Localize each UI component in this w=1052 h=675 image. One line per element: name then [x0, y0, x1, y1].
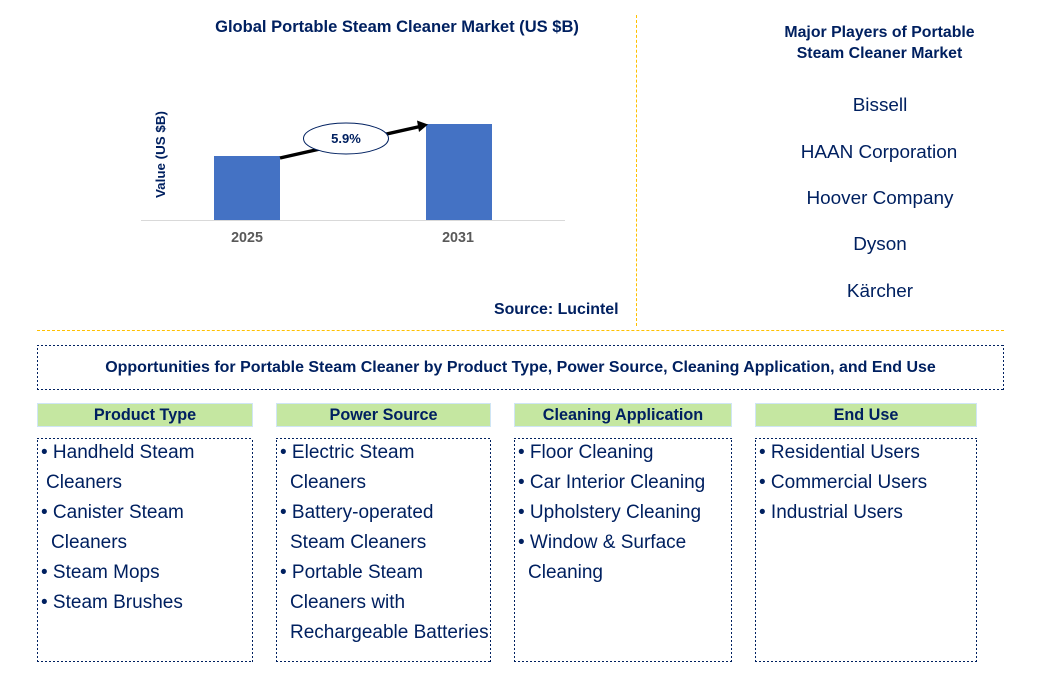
panel: product type: Cleaners [46, 472, 122, 493]
players heading: Steam Cleaner Market [797, 45, 962, 62]
panel: power source: Rechargeable Batteries [290, 622, 489, 643]
panel: product type: • Handheld Steam [41, 442, 194, 463]
column header: Power Source [276, 403, 491, 427]
panel: power source [276, 438, 491, 662]
player: Bissell: Bissell [853, 95, 907, 116]
horizontal divider [37, 330, 1004, 331]
panel: end use: • Residential Users [759, 442, 920, 463]
opportunities banner: Opportunities for Portable Steam Cleaner by Product Type, Power Source, Cleaning Application, and End Use [105, 359, 936, 376]
column header: Product Type: Product Type [94, 406, 196, 424]
panel: cleaning application: • Floor Cleaning [518, 442, 654, 463]
player: Dyson: Dyson [853, 234, 907, 255]
panel: product type: Cleaners [51, 532, 127, 553]
panel: end use: • Commercial Users [759, 472, 927, 493]
vertical divider [636, 15, 637, 326]
players heading: Major Players of Portable [784, 24, 975, 41]
panel: cleaning application: • Window & Surface [518, 532, 686, 553]
column header: End Use [755, 403, 977, 427]
panel: power source: • Portable Steam [280, 562, 423, 583]
column header: End Use: End Use [834, 406, 898, 424]
growth arrow [280, 120, 428, 158]
growth rate ellipse [304, 123, 388, 154]
panel: product type: • Steam Mops [41, 562, 160, 583]
player list [801, 95, 957, 302]
player: HAAN Corporation: HAAN Corporation [801, 142, 957, 163]
bar: 2031 [426, 124, 492, 220]
source note: Source: Lucintel [494, 301, 618, 318]
panel: product type: • Steam Brushes [41, 592, 183, 613]
player: Kärcher: Kärcher [847, 281, 913, 302]
x label 2031: 2031 [442, 230, 474, 246]
panel: cleaning application [514, 438, 732, 662]
bar: 2025 [214, 156, 280, 220]
column header: Cleaning Application: Cleaning Application [543, 406, 703, 424]
panel: end use: • Industrial Users [759, 502, 903, 523]
bar chart [141, 111, 565, 246]
column header: Power Source: Power Source [330, 406, 437, 424]
panel: power source: • Electric Steam [280, 442, 414, 463]
y axis label: Value (US $B) [153, 111, 168, 198]
panel: power source: Cleaners with [290, 592, 405, 613]
panel: power source: Cleaners [290, 472, 366, 493]
column header: Product Type [37, 403, 253, 427]
opportunities banner [37, 345, 1004, 390]
player: Hoover Company: Hoover Company [806, 188, 954, 209]
panel: cleaning application: • Upholstery Cleaning [518, 502, 701, 523]
panel: power source: • Battery-operated [280, 502, 433, 523]
panel: product type [37, 438, 253, 662]
panel: product type: • Canister Steam [41, 502, 184, 523]
column header: Cleaning Application [514, 403, 732, 427]
panel: power source: Steam Cleaners [290, 532, 426, 553]
chart title: Global Portable Steam Cleaner Market (US $B) [215, 17, 579, 36]
axis baseline [141, 220, 565, 222]
players heading [784, 24, 975, 62]
x label 2025: 2025 [231, 230, 263, 246]
growth rate ellipse: 5.9% [331, 131, 361, 146]
panel: end use [755, 438, 977, 662]
panel: cleaning application: • Car Interior Cleaning [518, 472, 705, 493]
panel: cleaning application: Cleaning [528, 562, 603, 583]
